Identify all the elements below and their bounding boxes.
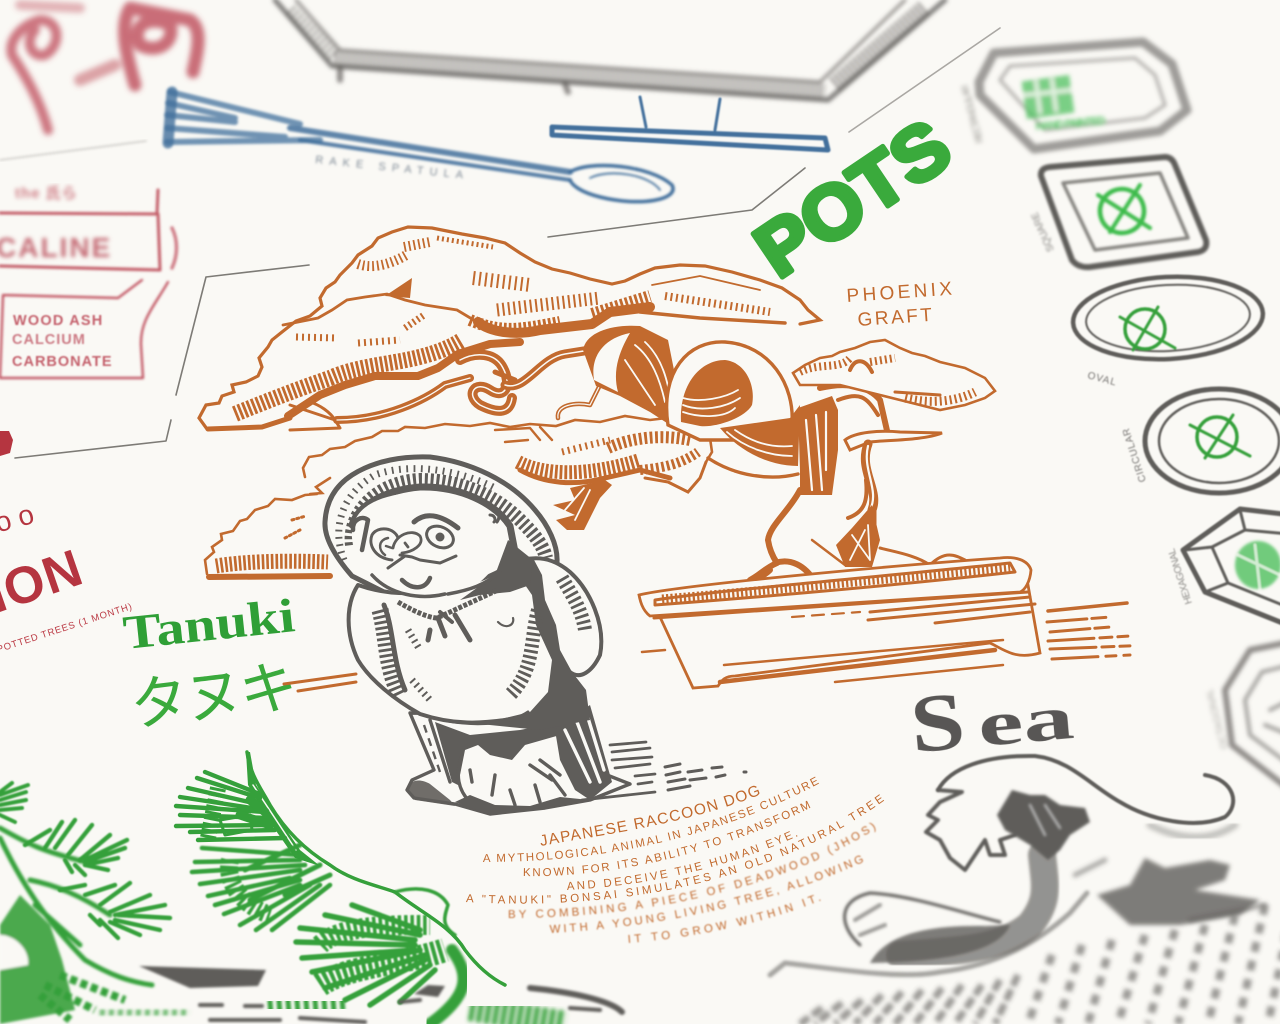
text: carbonate: CARBONATE (12, 354, 113, 370)
pot: square: SQUARE (1029, 210, 1057, 253)
text: wood ash: WOOD ASH (13, 313, 103, 329)
text: calcium: CALCIUM (12, 332, 86, 348)
pot: hexagonal (1166, 509, 1280, 626)
foliage upper clump (176, 772, 285, 840)
heading: pots: POTS (740, 103, 966, 294)
foliage lower clump (296, 889, 455, 1005)
label: tanuki heading: Tanuki (121, 589, 297, 660)
lower spill foliage (268, 1002, 345, 1008)
bonsai pot (639, 558, 1040, 688)
knot: central graft loop (583, 326, 838, 495)
small wave (845, 893, 1000, 945)
pine trunk (0, 828, 190, 1024)
illustration: great wave (770, 756, 1280, 1024)
foliage: middle band (303, 416, 712, 530)
pot: octagonal: OCTAGONAL (1204, 687, 1231, 750)
pine foliage upper (25, 820, 127, 875)
foliage: top crown (199, 227, 820, 429)
speed lines: bonsai pot (1047, 603, 1152, 659)
illustration: red knots top left (11, 5, 198, 130)
label: phoenix graft: GRAFT (857, 305, 934, 331)
line: known for: KNOWN FOR ITS ABILITY TO TRANSFORM (524, 800, 810, 876)
pot: oval (1071, 272, 1265, 389)
wave foam (926, 790, 1015, 870)
illustration: green pine right (176, 752, 565, 1024)
divider: connectors around the bonsai (0, 28, 1000, 458)
heading: sea (907, 665, 1077, 770)
pot: oval: OVAL (1086, 370, 1118, 389)
tanuki hat (325, 457, 557, 600)
line: deceive: AND DECEIVE THE HUMAN EYE. (567, 831, 798, 890)
wave base line (770, 893, 1087, 975)
foliage: lower left (205, 478, 345, 578)
foliage middle clump (192, 845, 330, 930)
back swell (1097, 858, 1260, 925)
wave dark crest (997, 790, 1090, 860)
trunk (742, 385, 965, 590)
pot: circular: CIRCULAR (1121, 427, 1149, 483)
illustration: grey bench top (275, 0, 945, 100)
heading: sea: ea (975, 684, 1077, 760)
pine branch tip far left (0, 783, 28, 822)
line: young tree: WITH A YOUNG LIVING TREE, ALLOWING (548, 854, 864, 934)
shadow lines: tanuki (582, 742, 746, 800)
pot: rectangular (960, 42, 1187, 149)
wave crest line (938, 756, 1233, 823)
line: grow: IT TO GROW WITHIN IT. (627, 894, 822, 944)
branches: twisted limbs (290, 350, 600, 430)
panel: alkaline soil labels (0, 185, 176, 378)
tanuki rope (398, 590, 498, 640)
label: phoenix graft: PHOENIX (846, 279, 954, 307)
root flare (430, 950, 464, 1024)
illustration: tanuki figure (325, 457, 746, 815)
pine foliage lower (60, 883, 170, 938)
pot: rectangular: HAND PAINTED (1035, 115, 1106, 133)
pine trunk line (247, 752, 505, 985)
label: tanuki katakana: タヌキ (125, 639, 302, 743)
panel: red fertilisation fragment (0, 431, 134, 655)
wave stem (900, 855, 1045, 955)
tanuki head (352, 492, 533, 600)
heading: sea: S (907, 675, 968, 770)
red fragment (0, 431, 13, 456)
illustration: blue tool (552, 97, 828, 150)
illustration: green pine left (0, 783, 190, 1024)
line: combining: BY COMBINING A PIECE OF DEADWOOD (JHOS) (508, 822, 877, 920)
speed lines: katakana (284, 674, 356, 691)
label: rake spatula: RAKE SPATULA (315, 154, 465, 182)
tanuki legs (407, 700, 630, 815)
panel: pot shapes (960, 42, 1280, 790)
heading: japanese raccoon dog: JAPANESE RACCOON DOG (540, 786, 760, 846)
label: small header: the 氏ら (15, 185, 78, 202)
tanuki face (353, 507, 499, 587)
illustration: rake spatula (167, 92, 673, 202)
pot: circular (1121, 389, 1280, 493)
text: japanese raccoon dog (466, 776, 884, 944)
illustration: phoenix graft bonsai (199, 227, 1152, 688)
tanuki body (349, 558, 601, 730)
pot: hexagonal: HEXAGONAL (1166, 546, 1195, 605)
line: mythological animal: A MYTHOLOGICAL ANIMAL IN JAPANESE CULTURE (482, 776, 819, 862)
line: tanuki bonsai: A "TANUKI" BONSAI SIMULATES AN OLD NATURAL TREE (466, 794, 884, 904)
pot: rectangular: RECTANGULAR (960, 83, 986, 144)
pot: octagonal (1204, 642, 1280, 790)
illustration: grey ground strips (139, 966, 622, 1022)
pot: square (1029, 157, 1206, 267)
halftone sea (800, 895, 1280, 1024)
label: phoenix graft (846, 279, 954, 331)
foliage: right crown (793, 340, 995, 410)
